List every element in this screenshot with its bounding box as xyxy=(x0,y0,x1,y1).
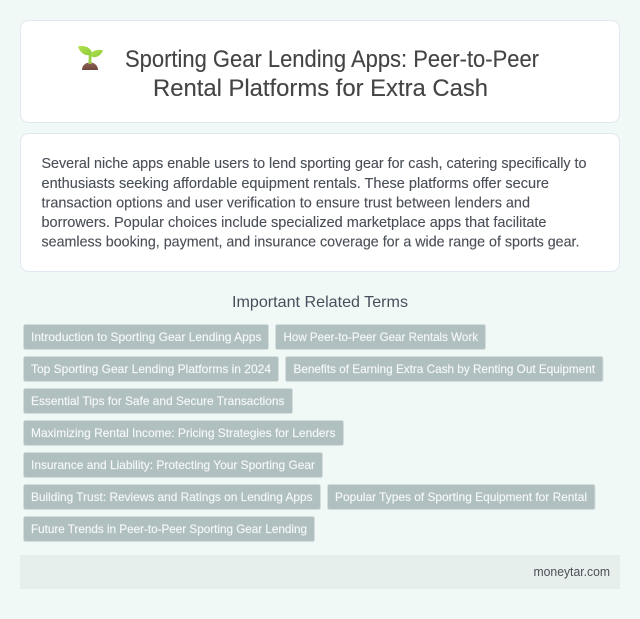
tag: safety tips: Essential Tips for Safe and Secure Transactions xyxy=(31,394,284,408)
footer bar xyxy=(20,555,620,589)
tag: safety tips xyxy=(24,388,292,414)
summary paragraph xyxy=(42,156,586,250)
icon: seedling xyxy=(78,46,103,70)
tag: top platforms xyxy=(24,356,278,382)
tag: introduction: Introduction to Sporting Gear Lending Apps xyxy=(31,330,262,344)
tag: trust: Building Trust: Reviews and Ratings on Lending Apps xyxy=(31,490,312,504)
heading: important related terms: Important Related Terms xyxy=(232,294,408,311)
tag: trust xyxy=(24,484,320,510)
summary paragraph: enthusiasts seeking affordable equipment rentals. These platforms offer secure xyxy=(42,176,549,192)
summary paragraph: Several niche apps enable users to lend sporting gear for cash, catering specifically to xyxy=(42,156,586,172)
title: Sporting Gear Lending Apps: Peer-to-Peer xyxy=(125,46,539,73)
footer: site name: moneytar.com xyxy=(534,564,610,579)
panel: title card xyxy=(20,20,620,122)
tag: equipment types xyxy=(328,484,595,510)
tag list xyxy=(24,324,603,542)
tag: introduction xyxy=(24,324,268,350)
tag: insurance xyxy=(24,452,322,478)
summary paragraph: seamless booking, payment, and insurance coverage for a wide range of sports gear. xyxy=(42,234,580,250)
tag: top platforms: Top Sporting Gear Lending Platforms in 2024 xyxy=(31,362,271,376)
tag: how rentals work: How Peer-to-Peer Gear Rentals Work xyxy=(284,330,479,344)
tag: benefits xyxy=(286,356,603,382)
tag: pricing xyxy=(24,420,344,446)
title: Rental Platforms for Extra Cash xyxy=(153,75,488,102)
tag: benefits: Benefits of Earning Extra Cash by Renting Out Equipment xyxy=(294,362,596,376)
panel: summary text card xyxy=(20,134,620,272)
tag: future trends: Future Trends in Peer-to-Peer Sporting Gear Lending xyxy=(31,522,307,536)
tag: insurance: Insurance and Liability: Protecting Your Sporting Gear xyxy=(31,458,315,472)
summary paragraph: transaction options and user verification to ensure trust between lenders and xyxy=(42,196,530,212)
tag: equipment types: Popular Types of Sporting Equipment for Rental xyxy=(335,490,587,504)
title xyxy=(125,46,539,102)
summary paragraph: borrowers. Popular choices include specialized marketplace apps that facilitate xyxy=(42,215,546,231)
tag: future trends xyxy=(24,516,314,542)
tag: pricing: Maximizing Rental Income: Pricing Strategies for Lenders xyxy=(31,426,336,440)
tag: how rentals work xyxy=(276,324,486,350)
